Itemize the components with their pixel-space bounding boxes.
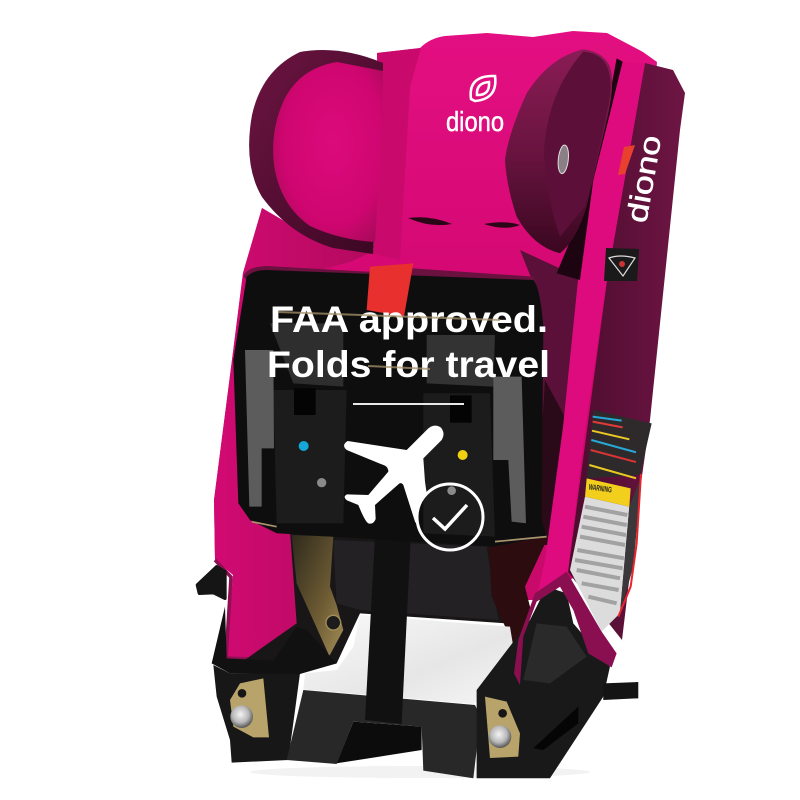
wing inner cushion [273,62,383,242]
upper slot left [408,217,452,225]
lower frame and base [197,530,638,778]
upper slot right [484,222,520,228]
shadow behind wing [557,58,623,280]
seat back shell [214,31,657,600]
maroon rim above plate [243,266,537,285]
headline line 2: Folds for travel [267,343,550,385]
instruction rule blue 2 [591,440,636,452]
badge mark [609,256,635,276]
left knob [197,567,225,598]
plate upper left panel [270,323,343,387]
centre base [287,690,481,778]
left head wing [249,50,383,254]
warning word: WARNING [588,482,612,495]
label dark instruction block [587,410,652,478]
left black base [213,665,300,763]
blue dot [299,441,309,451]
right strap [603,682,638,700]
brass edge right [495,537,547,542]
wing pink tab [590,42,623,62]
label yellow warning [585,478,631,507]
red side tag [618,145,635,175]
plate bolt left [317,478,326,487]
inner shadow right of back plate [520,250,585,540]
instruction rule yellow 2 [589,465,636,478]
yellow dot [458,450,468,460]
base centre notch [337,722,422,763]
dark seat interior [240,530,530,673]
upper rod [278,312,500,320]
side diono wordmark: diono [621,133,668,225]
lower dark edge right of back plate [535,380,572,545]
right plate hole [498,709,507,718]
logo wordmark: diono [446,106,504,137]
wing outer bolster [249,50,383,254]
rods across headline [278,312,500,369]
seat belt [365,537,411,724]
headline [267,298,550,385]
wing badge [557,145,570,174]
car seat photo illustration [197,31,685,778]
red strap [367,263,413,317]
wing inner panel [544,52,610,237]
label dark right strip [620,475,642,613]
label white text block [570,497,629,632]
vent slats [533,707,578,750]
instruction rule blue [593,417,622,421]
right velcro strip [493,377,526,523]
instruction rule yellow [592,431,629,439]
left body side [214,208,372,658]
plate lower left panel [273,390,347,523]
plate upper right panel [427,335,495,387]
safety badge on side [604,248,639,281]
right black base [477,587,610,778]
central left band [373,48,421,260]
plate lower right panel [423,393,495,537]
icon: airplane [344,426,444,524]
right piping [514,572,617,685]
icon: check circle [417,484,483,550]
left velcro strip [245,350,274,507]
right metal plate [485,697,520,758]
bracket hole [326,615,341,630]
label coloured lines [589,417,636,478]
left lower piping [215,560,297,660]
instruction rule red [593,422,623,427]
right bolt [489,725,511,748]
pink side strip [537,62,645,596]
icon: check mark [433,505,467,529]
folded back plate [233,263,547,547]
icon: airplane with check [344,426,483,550]
left plate hole [238,689,246,698]
wing body [505,49,612,253]
instruction rule red 2 [591,450,636,462]
label red edge [618,474,641,617]
mesh panel [333,540,498,620]
headline line 1: FAA approved. [270,298,548,340]
left black window [294,388,316,415]
right head wing [505,42,623,280]
harness slots [408,217,520,228]
plate holes [238,689,507,718]
left base guard [212,607,337,674]
logo mark [471,76,495,101]
side dark panel [568,63,685,640]
lower rod [368,366,430,369]
left metal plate [230,678,269,737]
headline divider [353,403,464,405]
white foam [303,615,515,704]
left bracket [292,535,343,656]
right black window [450,395,472,423]
label grey text lines [575,507,627,603]
right bracket [489,537,548,648]
plate bolt right [447,486,456,495]
diono centre logo [446,76,504,137]
badge centre [619,261,625,267]
brass edge left [252,522,277,527]
warning label on side [570,410,652,632]
plate body [233,270,547,547]
right base highlight [523,623,587,683]
floor shadow [250,766,590,778]
badge background [604,248,639,281]
left bolt [230,705,253,728]
